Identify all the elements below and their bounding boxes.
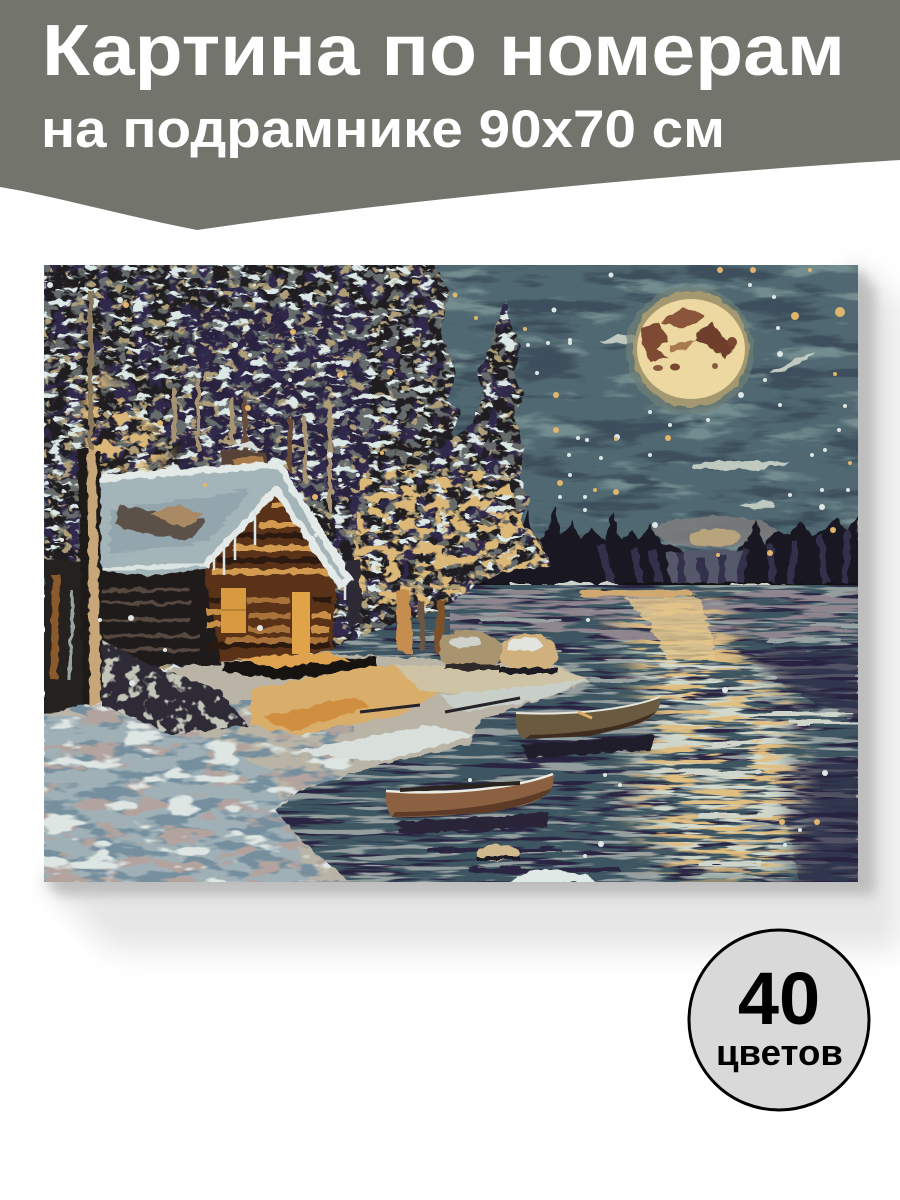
rear canoe [516, 697, 660, 758]
glowing window [221, 588, 246, 633]
snow mounds in the water [476, 845, 600, 882]
warm grove foliage [350, 470, 555, 610]
cabin gable wall [204, 482, 336, 662]
sky [44, 265, 858, 595]
header banner [0, 0, 900, 230]
foreground pine trunk [78, 290, 102, 706]
snowy ground [44, 650, 590, 882]
badge label: цветов [716, 1032, 843, 1073]
chimney [220, 440, 267, 466]
shrubs at the shore [438, 630, 558, 674]
shrub by cabin corner [100, 635, 250, 735]
log cabin [97, 442, 377, 680]
canvas drop shadow [44, 265, 900, 950]
porch [222, 652, 377, 680]
light ripples [400, 620, 858, 870]
subtitle: на подрамнике 90х70 см [41, 100, 725, 159]
falling snowflakes [47, 272, 850, 858]
icicles [214, 510, 345, 600]
moon [626, 286, 754, 414]
title: Картина по номерам [42, 11, 845, 91]
badge: number of colours [689, 930, 869, 1110]
forest mass with snowy branches [44, 265, 555, 725]
snowy roof [97, 464, 350, 600]
warm trunks by the cabin [345, 560, 446, 655]
water [270, 585, 858, 882]
tree trunks [175, 380, 330, 510]
front canoe [386, 774, 554, 834]
glowing door [292, 592, 310, 654]
far tree line [470, 505, 858, 590]
cabin side wall [97, 565, 222, 665]
dark tree shadow at the left edge [44, 560, 84, 715]
painting: winter cabin by the lake under the moon [44, 265, 858, 882]
warm branches of left pine [68, 366, 180, 474]
badge number: 40 [738, 957, 820, 1040]
